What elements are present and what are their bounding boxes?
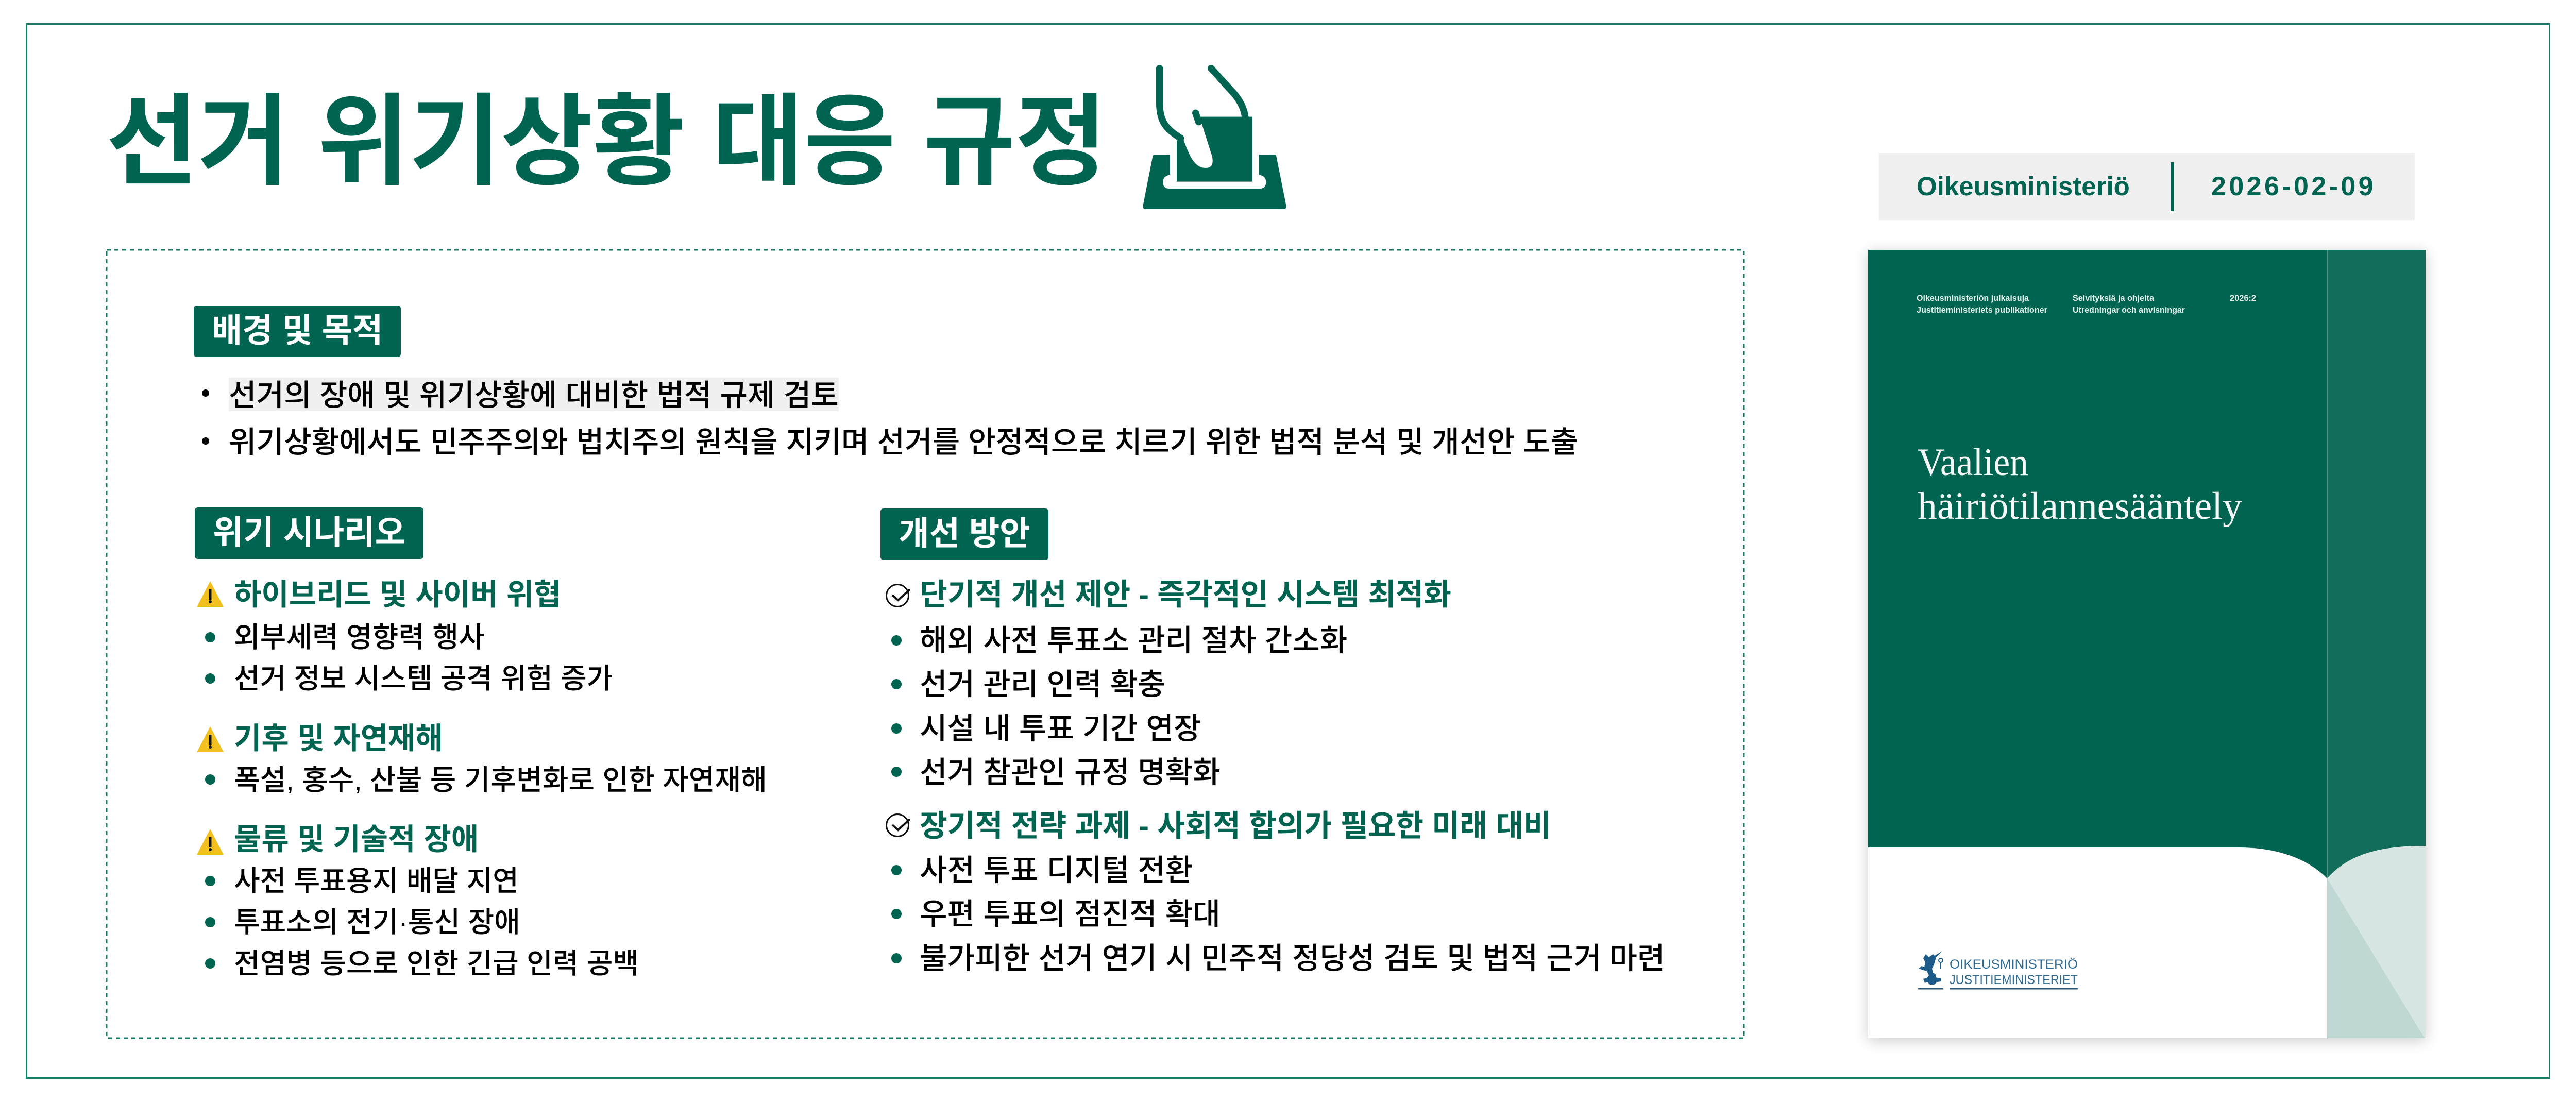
panel: crisis scenarios list (197, 578, 767, 979)
bullet (891, 679, 902, 689)
bullet (205, 958, 215, 969)
text: 선거 정보 시스템 공격 위험 증가 (234, 663, 613, 694)
date: 2026-02-09 (2211, 172, 2376, 201)
panel: improvement measures list (886, 578, 1665, 975)
text: 사전 투표용지 배달 지연 (234, 865, 519, 897)
bullet (205, 774, 215, 785)
bullet (891, 723, 902, 734)
heading: climate and natural disasters: 기후 및 자연재해 (234, 722, 443, 755)
heading: background and purpose (194, 306, 401, 357)
heading: long-term tasks: 장기적 전략 과제 - 사회적 합의가 필요한 미래 대비 (920, 809, 1551, 843)
panel: background and purpose (194, 306, 1578, 459)
icon: check 2 (886, 813, 911, 837)
panel: main dashed box (106, 249, 1744, 1039)
report cover: Selvityksiä ja ohjeita (2073, 293, 2155, 303)
text: 시설 내 투표 기간 연장 (920, 712, 1201, 745)
bullet 1 (202, 389, 209, 397)
heading: short-term proposals: 단기적 개선 제안 - 즉각적인 시스템 최적화 (920, 578, 1451, 612)
highlight on first line (229, 378, 839, 411)
text: purpose line 2: 위기상황에서도 민주주의와 법치주의 원칙을 지키며 선거를 안정적으로 치르기 위한 법적 분석 및 개선안 도출 (229, 426, 1578, 459)
report cover: Justitieministeriets publikationer (1917, 305, 2047, 315)
heading: improvement measures (880, 508, 1048, 560)
icon: check 1 (886, 584, 911, 607)
text: purpose line 1: 선거의 장애 및 위기상황에 대비한 법적 규제 검토 (229, 379, 839, 412)
bullet (205, 632, 215, 642)
bullet 2 (202, 437, 209, 445)
report cover: 2026:2 (2230, 293, 2256, 303)
text: 선거 참관인 규정 명확화 (920, 756, 1221, 789)
icon: hand casting ballot (1143, 65, 1286, 209)
text: 전염병 등으로 인한 긴급 인력 공백 (234, 947, 639, 979)
heading: crisis scenarios: 위기 시나리오 (213, 514, 405, 551)
bullet (891, 865, 902, 875)
bullet (205, 876, 215, 886)
text: 투표소의 전기·통신 장애 (234, 906, 520, 938)
bullet (891, 909, 902, 919)
bullet (205, 917, 215, 927)
text: 폭설, 홍수, 산불 등 기후변화로 인한 자연재해 (234, 764, 767, 796)
bullet (205, 673, 215, 684)
icon: warning 2 (197, 726, 224, 752)
heading: improvement measures: 개선 방안 (899, 515, 1030, 552)
text: 사전 투표 디지털 전환 (920, 854, 1193, 887)
report cover: JUSTITIEMINISTERIET (1950, 973, 2078, 987)
bullet (891, 767, 902, 777)
source name: Oikeusministeriö (1917, 172, 2130, 201)
report cover: Oikeusministeriön julkaisuja (1917, 293, 2029, 303)
heading: logistics and technical failures: 물류 및 기술적 장애 (234, 823, 479, 856)
report cover: Vaalien (1918, 441, 2028, 484)
report cover: OIKEUSMINISTERIÖ (1950, 957, 2078, 972)
bullet (891, 953, 902, 963)
heading: crisis scenarios (195, 507, 423, 559)
heading: hybrid and cyber threats: 하이브리드 및 사이버 위협 (234, 578, 561, 612)
icon: warning 3 (197, 829, 224, 855)
text: 해외 사전 투표소 관리 절차 간소화 (920, 624, 1347, 657)
heading: background and purpose: 배경 및 목적 (212, 312, 383, 349)
text: 외부세력 영향력 행사 (234, 621, 485, 653)
report cover: häiriötilannesääntely (1918, 485, 2242, 528)
text: 우편 투표의 점진적 확대 (920, 897, 1221, 931)
divider (2171, 162, 2174, 211)
report cover (1861, 246, 2432, 1047)
bullet (891, 635, 902, 646)
icon: warning 1 (197, 581, 224, 607)
source and date tag (1879, 153, 2415, 220)
text: 불가피한 선거 연기 시 민주적 정당성 검토 및 법적 근거 마련 (920, 942, 1665, 975)
title: 선거 위기상황 대응 규정 (106, 87, 1107, 198)
report cover: Utredningar och anvisningar (2073, 305, 2185, 315)
text: 선거 관리 인력 확충 (920, 668, 1165, 701)
